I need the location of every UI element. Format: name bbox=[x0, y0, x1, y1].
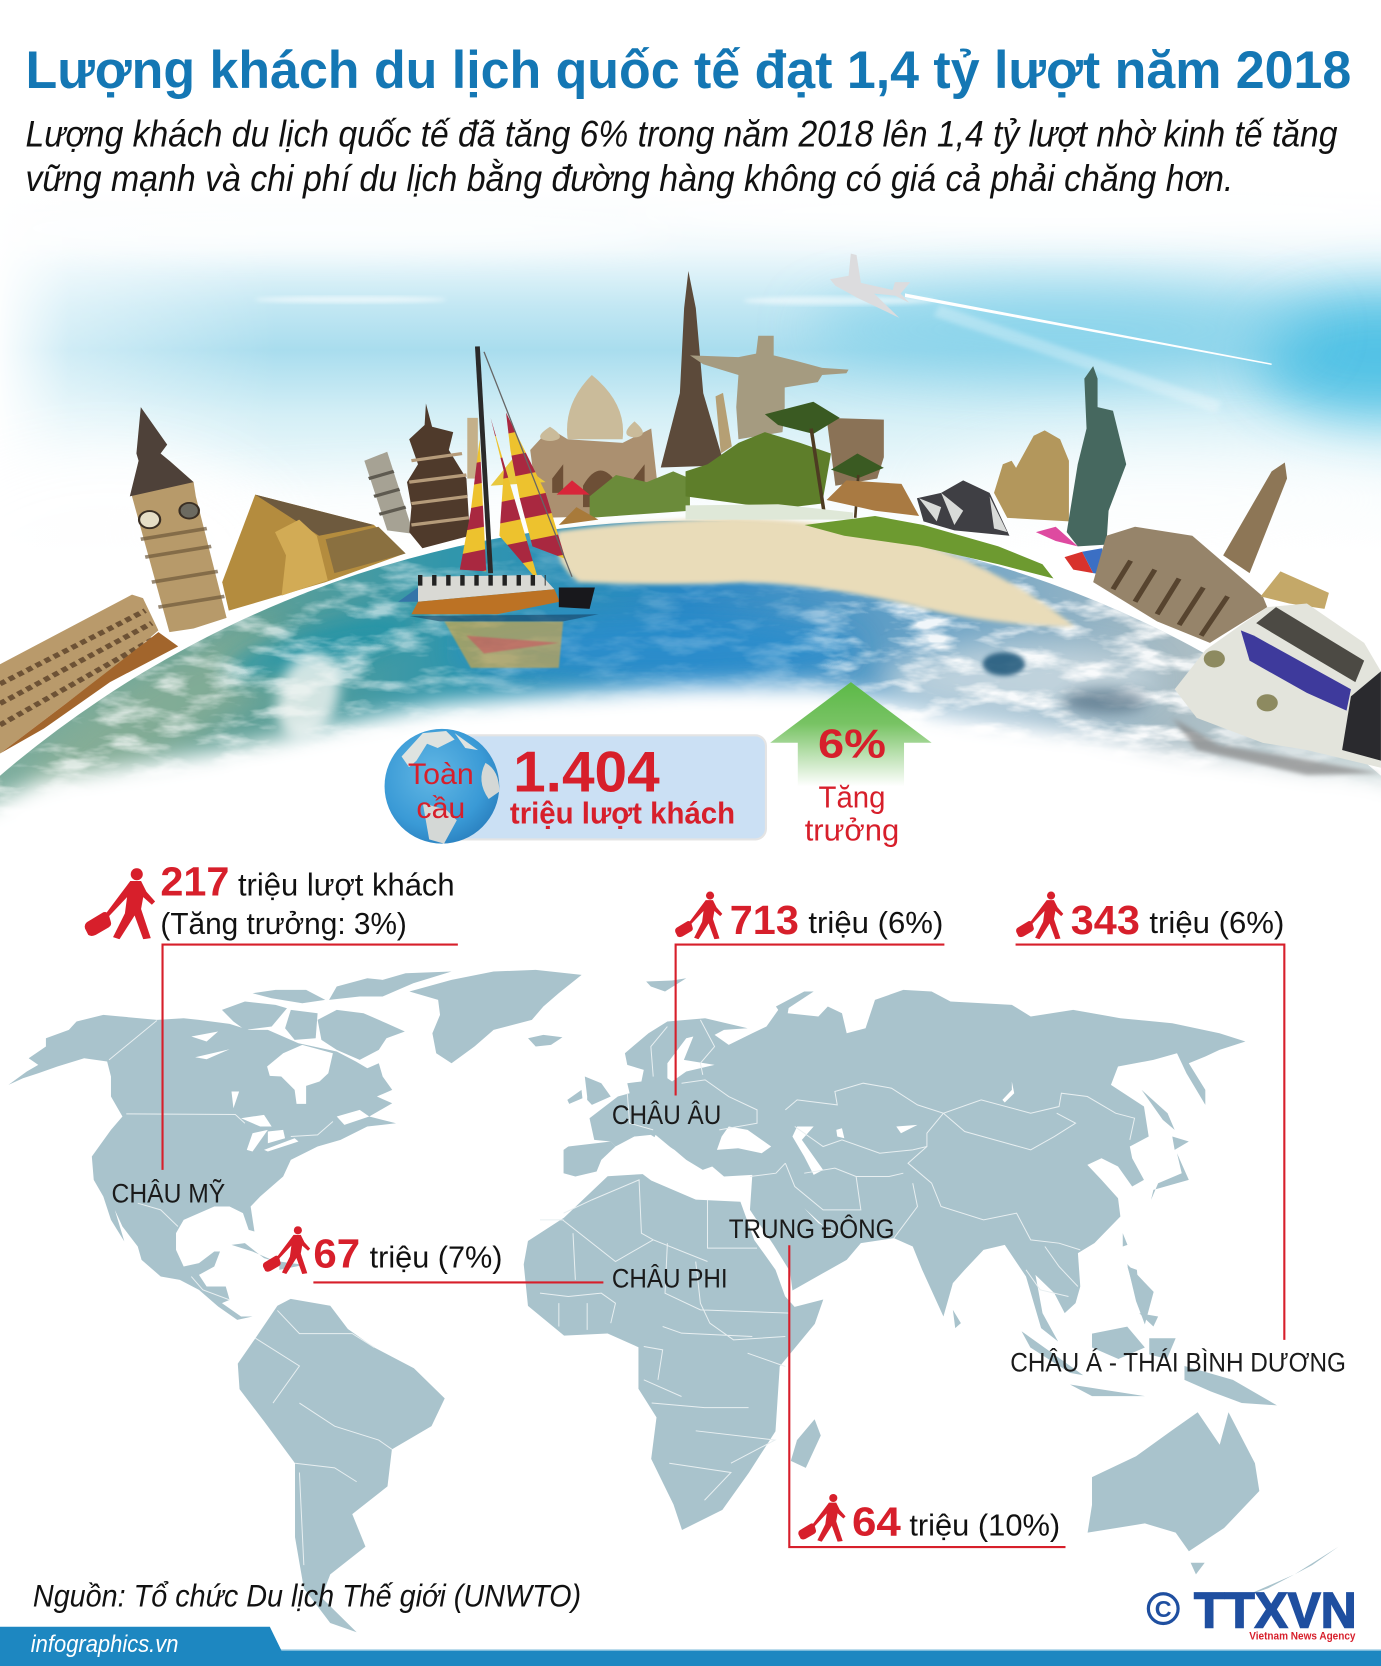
taj mahal bbox=[467, 375, 660, 518]
panel: global total bbox=[385, 729, 766, 844]
figures bbox=[852, 1498, 1060, 1544]
subtitle text: vững mạnh và chi phí du lịch bằng đường hàng không có giá cả phải chăng hơn. bbox=[25, 157, 1233, 199]
airplane and contrail bbox=[830, 254, 1272, 407]
figure: 1.404 million visitors bbox=[510, 741, 735, 830]
sydney opera house bbox=[917, 480, 1009, 536]
palms and red tent bbox=[557, 471, 690, 525]
subtitle text bbox=[25, 113, 1338, 199]
africa bbox=[524, 1174, 823, 1530]
figure: 1.404 million visitors: triệu lượt khách bbox=[510, 795, 735, 830]
figures: (Tăng trưởng: 3%) bbox=[160, 906, 407, 941]
region labels: CHÂU PHI bbox=[612, 1264, 728, 1294]
figures: triệu (6%) bbox=[1149, 905, 1284, 940]
wordmark: TTXVN bbox=[1194, 1583, 1357, 1639]
stat: asia pacific bbox=[1016, 892, 1284, 943]
figures bbox=[1071, 897, 1284, 943]
stat: europe bbox=[675, 892, 943, 943]
figures bbox=[730, 897, 943, 943]
globe bbox=[0, 520, 1381, 816]
stat: middle east bbox=[798, 1494, 1060, 1544]
greek temple bbox=[1093, 527, 1267, 643]
seas and inland water bbox=[637, 1037, 1014, 1237]
label: Toàn cầu: cầu bbox=[416, 792, 465, 825]
agency name: Vietnam News Agency bbox=[1249, 1630, 1356, 1642]
region labels: TRUNG ĐÔNG bbox=[729, 1214, 894, 1244]
big ben bbox=[130, 407, 227, 632]
bullet train bbox=[1172, 604, 1381, 775]
north american lakes bbox=[191, 1032, 369, 1152]
icon: traveller bbox=[1016, 892, 1063, 939]
pagoda bbox=[407, 404, 470, 548]
icon: traveller bbox=[85, 868, 155, 939]
world map bbox=[8, 970, 1339, 1632]
sailboat bbox=[398, 346, 598, 668]
figures: 67 bbox=[313, 1231, 360, 1277]
right landmarks bbox=[686, 336, 1381, 775]
triumphal arch bbox=[827, 418, 884, 486]
icon: traveller bbox=[675, 892, 722, 939]
thatched hut bbox=[827, 480, 919, 516]
connector lines bbox=[163, 945, 1284, 1547]
beach umbrellas bbox=[1036, 526, 1103, 574]
icon: traveller bbox=[263, 1226, 310, 1274]
label: Toàn cầu: Toàn bbox=[408, 758, 474, 791]
growth label bbox=[805, 779, 899, 847]
stat background bbox=[442, 735, 766, 839]
icon: traveller bbox=[798, 1494, 846, 1542]
logo: TTXVN bbox=[1148, 1583, 1357, 1642]
figures: triệu lượt khách bbox=[238, 867, 455, 903]
christ the redeemer bbox=[690, 336, 849, 439]
minaret bbox=[716, 393, 732, 454]
pyramid and sphinx bbox=[222, 495, 406, 611]
stat: africa bbox=[263, 1226, 502, 1277]
sand beach bbox=[557, 517, 1075, 627]
figures bbox=[160, 859, 455, 941]
eiffel tower bbox=[661, 271, 724, 468]
region labels: CHÂU ÂU bbox=[612, 1100, 721, 1130]
copyright mark: C bbox=[1155, 1596, 1172, 1622]
growth label: Tăng bbox=[819, 779, 885, 815]
growth label: trưởng bbox=[805, 812, 899, 847]
north america and greenland bbox=[8, 970, 582, 1320]
figures bbox=[313, 1231, 502, 1277]
figure: 1.404 million visitors: 1.404 bbox=[513, 741, 660, 805]
sagrada familia bbox=[994, 430, 1069, 521]
south america, africa, australia bbox=[238, 1264, 1339, 1632]
region labels: CHÂU MỸ bbox=[112, 1179, 225, 1209]
figures: 217 bbox=[160, 859, 229, 905]
sky bbox=[6, 232, 1381, 498]
country borders bbox=[109, 1020, 1135, 1565]
region labels: CHÂU Á - THÁI BÌNH DƯƠNG bbox=[1010, 1348, 1346, 1378]
website label: infographics.vn bbox=[31, 1631, 178, 1658]
statue of liberty bbox=[1067, 366, 1126, 546]
growth value: 6% bbox=[818, 721, 886, 767]
obelisk bbox=[1223, 462, 1287, 573]
pisa tower bbox=[364, 452, 414, 534]
title: Lượng khách du lịch quốc tế đạt 1,4 tỷ lượt năm 2018 bbox=[25, 41, 1351, 100]
figures: triệu (10%) bbox=[909, 1507, 1060, 1542]
figures: triệu (6%) bbox=[808, 905, 943, 940]
distant building bbox=[1261, 571, 1329, 609]
hero illustration: world landmarks on a globe bbox=[0, 232, 1381, 816]
left landmarks bbox=[0, 346, 690, 754]
stat: americas bbox=[85, 859, 455, 941]
copyright mark bbox=[1148, 1594, 1178, 1624]
tropical trees bbox=[686, 402, 884, 520]
growth arrow bbox=[770, 682, 932, 847]
label: Toàn cầu bbox=[408, 758, 474, 825]
bushes bbox=[805, 516, 1054, 579]
figures: triệu (7%) bbox=[370, 1240, 502, 1275]
icon: globe bbox=[385, 729, 499, 844]
footer band bbox=[0, 1627, 1381, 1666]
colosseum bbox=[0, 595, 178, 754]
figures: 64 bbox=[852, 1498, 901, 1544]
eurasia bbox=[564, 978, 1245, 1342]
source note: Nguồn: Tổ chức Du lịch Thế giới (UNWTO) bbox=[33, 1577, 581, 1614]
region labels bbox=[112, 1100, 1346, 1378]
white fade beneath globe bbox=[0, 668, 1381, 850]
figures: 343 bbox=[1071, 897, 1140, 943]
figures: 713 bbox=[730, 897, 799, 943]
